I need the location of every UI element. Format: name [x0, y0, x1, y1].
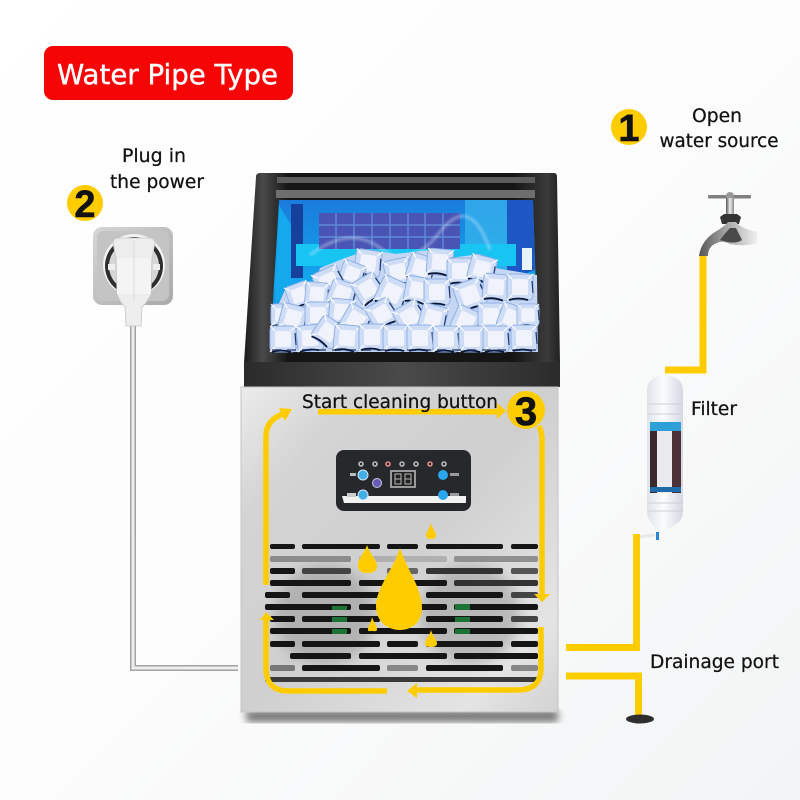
machine shadow — [246, 710, 558, 722]
label: Plug in the power — [110, 145, 204, 193]
label: Drainage port: Drainage port — [650, 651, 779, 673]
water pipe: filter to machine — [566, 534, 636, 648]
water flow arrow: lower left — [260, 612, 387, 691]
label: Filter: Filter — [691, 398, 737, 420]
power cable — [133, 320, 238, 668]
drainage pipe — [566, 676, 638, 715]
title badge: Water Pipe Type: Water Pipe Type — [57, 58, 278, 91]
indicator lights — [359, 462, 446, 466]
drain hole — [626, 714, 654, 724]
water filter — [638, 376, 683, 540]
label: Open water source: water source — [660, 130, 778, 152]
step 1 badge — [611, 108, 647, 150]
label: Plug in the power: the power — [110, 171, 204, 193]
icon: wall socket and plug — [93, 227, 173, 326]
label: Open water source — [660, 105, 778, 152]
glass window — [270, 200, 538, 352]
digital display — [390, 470, 416, 488]
water flow arrow: upper left — [266, 408, 292, 585]
label: Plug in the power: Plug in — [122, 145, 186, 167]
step 3 badge: 3 — [515, 390, 537, 434]
stainless steel body — [241, 387, 558, 712]
fan shadows behind the slats — [275, 565, 520, 665]
water flow arrow: top — [318, 403, 506, 419]
water drops — [358, 523, 437, 647]
icon: water tap — [699, 192, 757, 256]
panel buttons — [347, 470, 459, 500]
label: Open water source: Open — [692, 105, 742, 127]
water flow arrow: right — [534, 426, 550, 602]
fan green lights — [332, 604, 470, 634]
ice cubes — [270, 248, 539, 352]
title badge: Water Pipe Type — [44, 46, 293, 100]
step 3 badge — [507, 390, 545, 434]
ice machine upper cabinet — [244, 173, 560, 387]
step 2 badge: 2 — [74, 184, 96, 226]
step 2 badge — [67, 184, 103, 226]
label: Start cleaning button: Start cleaning button — [302, 391, 498, 413]
step 1 badge: 1 — [618, 108, 640, 150]
water pipe: tap to filter — [665, 256, 703, 370]
water flow arrow: lower right — [407, 627, 541, 698]
ventilation grille — [265, 544, 540, 682]
control panel — [336, 450, 471, 511]
